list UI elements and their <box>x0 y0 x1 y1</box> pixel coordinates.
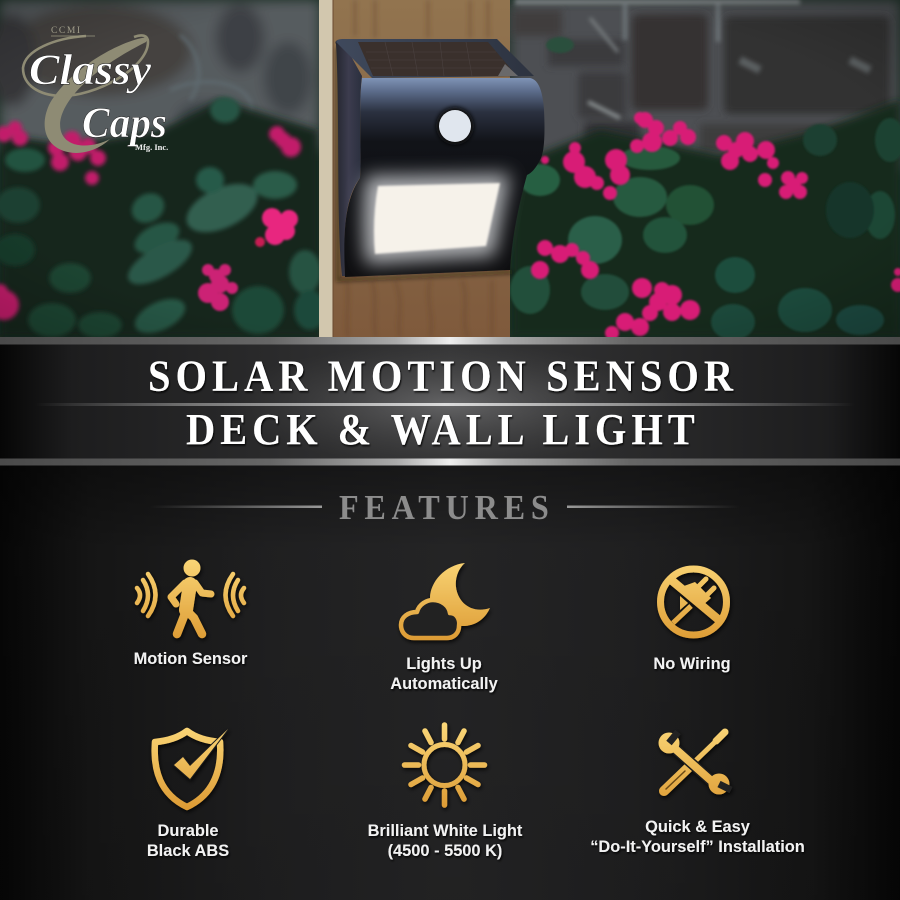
motion sensor <box>436 107 474 145</box>
label: no wiring: No Wiring <box>653 655 731 673</box>
label: brilliant white light <box>368 822 523 860</box>
fixture top frame <box>336 39 534 78</box>
geranium flowers <box>0 121 301 320</box>
icon: shield with check <box>155 729 228 807</box>
logo swash <box>23 35 148 153</box>
title banner <box>0 337 900 466</box>
lamp glow <box>363 174 510 264</box>
label: quick and easy installation: Quick & Easy <box>645 818 751 836</box>
label: brilliant white light: Brilliant White Light <box>368 822 523 840</box>
foliage <box>0 100 900 337</box>
feature: quick and easy <box>590 732 805 856</box>
icon: moon and cloud <box>401 563 490 638</box>
logo Mfg: Mfg. Inc. <box>135 142 168 152</box>
feature: no wiring <box>653 569 731 673</box>
icon: crossed wrench and screwdriver <box>658 732 731 794</box>
lamp lens <box>374 183 500 254</box>
panel: lower background <box>0 460 900 900</box>
logo Caps: Caps <box>82 100 167 147</box>
feature: motion sensor <box>134 560 248 668</box>
stone wall <box>0 0 900 170</box>
label: durable black ABS: Black ABS <box>147 842 229 860</box>
label: durable black ABS: Durable <box>157 822 219 840</box>
wooden post <box>319 0 510 337</box>
title line 2: DECK & WALL LIGHT <box>186 405 695 454</box>
features heading: FEATURES <box>339 489 549 527</box>
label: motion sensor: Motion Sensor <box>134 650 248 668</box>
icon: sun <box>404 725 484 805</box>
icon: crossed-out plug <box>660 569 726 635</box>
logo CCMI: CCMI <box>51 26 82 36</box>
label: brilliant white light: (4500 - 5500 K) <box>388 842 502 860</box>
label: lights up automatically <box>390 655 499 693</box>
label: lights up automatically: Automatically <box>390 675 499 693</box>
solar light fixture <box>335 39 544 280</box>
fixture side <box>335 40 362 276</box>
label: quick and easy installation: “Do-It-Yourself” Installation <box>590 838 805 856</box>
panel: garden photo <box>0 0 900 340</box>
soft shadow <box>338 48 512 280</box>
label: lights up automatically: Lights Up <box>406 655 482 673</box>
feature: lights up automatically <box>390 563 499 693</box>
icon: walking person with waves <box>137 560 244 634</box>
title line 1: SOLAR MOTION SENSOR <box>148 352 734 401</box>
label: durable black ABS <box>147 822 229 860</box>
feature: durable black ABS <box>147 729 229 860</box>
fixture front <box>344 78 544 277</box>
solar panel <box>358 42 518 76</box>
logo: Classy Caps <box>23 26 168 153</box>
feature: brilliant white light <box>368 725 523 860</box>
logo Classy: Classy <box>29 47 152 94</box>
label: quick and easy installation <box>590 818 805 856</box>
